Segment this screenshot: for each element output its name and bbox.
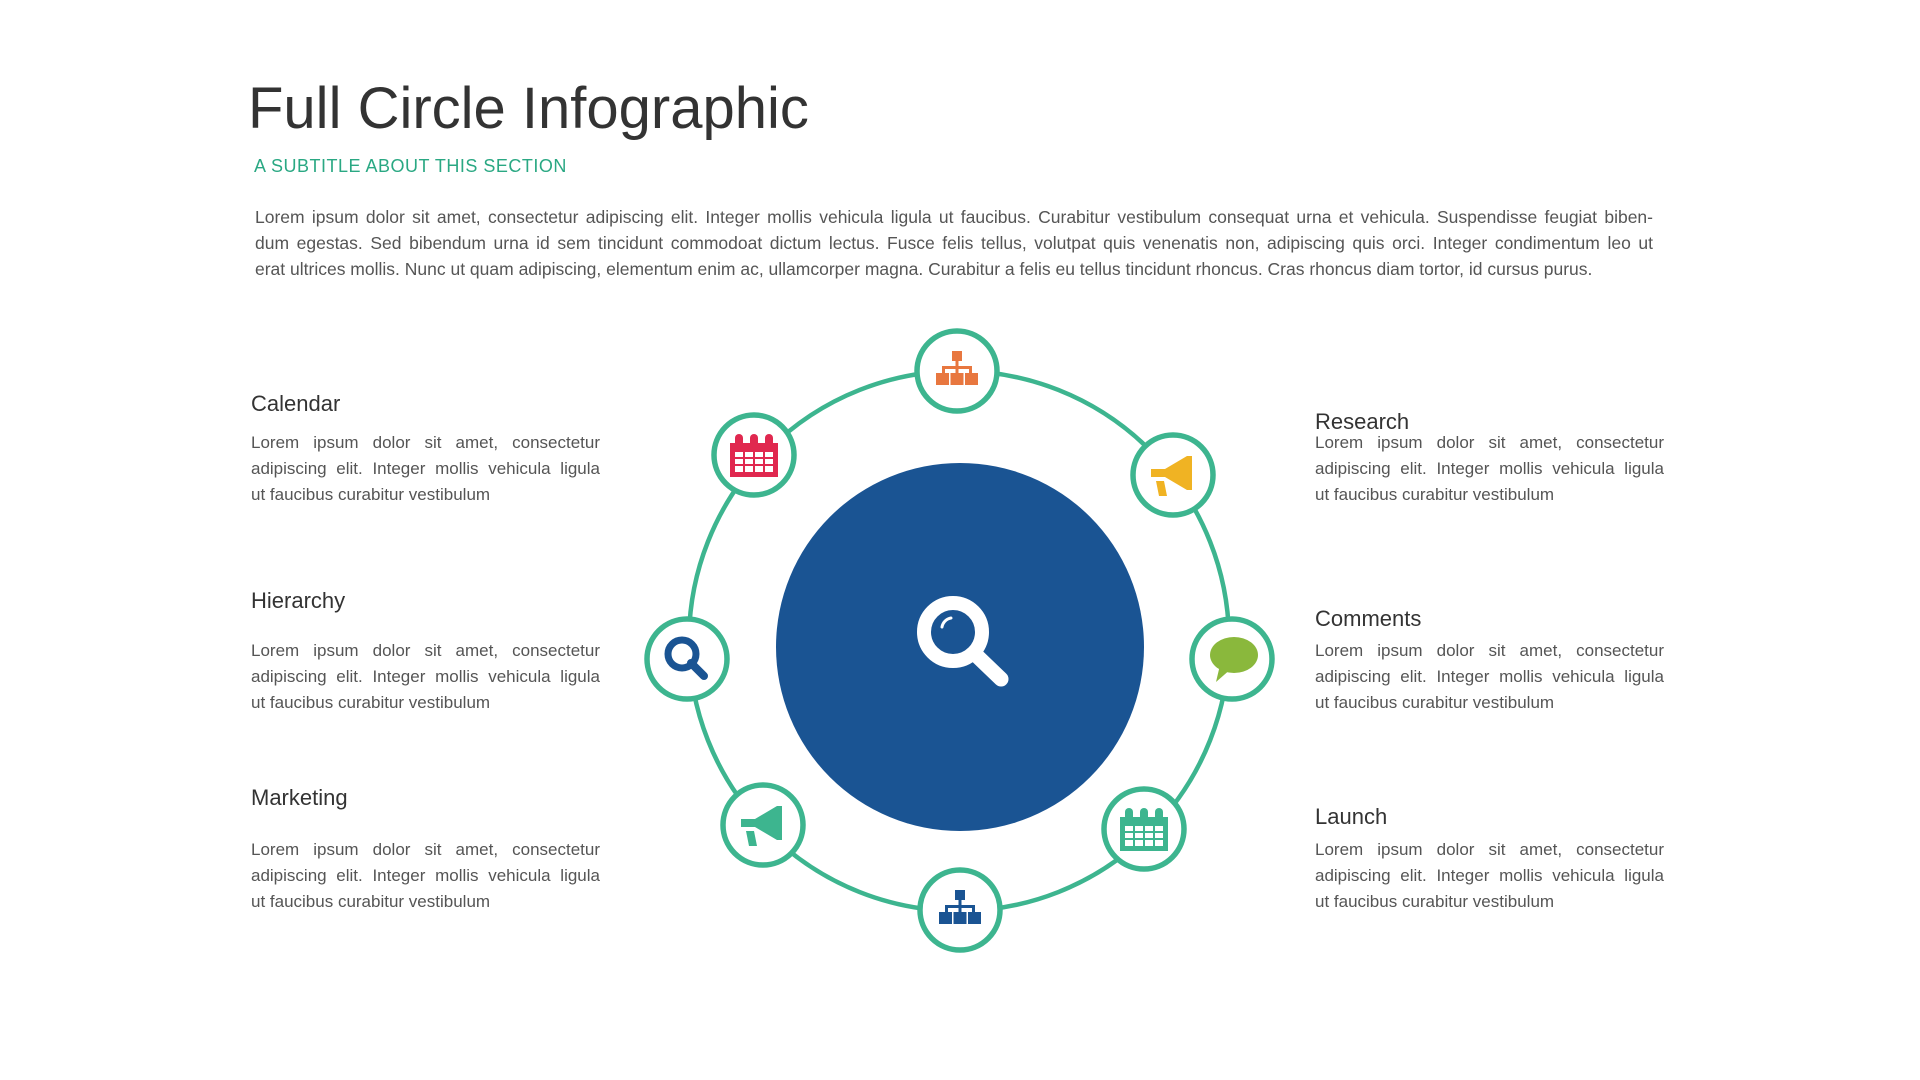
text: Hierarchy: adipiscing elit. Integer mollis vehicula ligula <box>251 667 600 686</box>
intro paragraph: erat ultrices mollis. Nunc ut quam adipiscing, elementum enim ac, ullamcorper magna. Curabitur a felis eu tellus tincidunt rhoncus. Cras rhoncus diam tortor, id cursus purus. <box>255 259 1592 279</box>
text: Comments: adipiscing elit. Integer mollis vehicula ligula <box>1315 667 1664 686</box>
text: Launch: ut faucibus curabitur vestibulum <box>1315 892 1554 911</box>
heading: Research: Research <box>1315 409 1409 434</box>
text: Comments: ut faucibus curabitur vestibulum <box>1315 693 1554 712</box>
node: calendar <box>714 415 794 495</box>
node: search <box>647 619 727 699</box>
text: Research: ut faucibus curabitur vestibulum <box>1315 485 1554 504</box>
text: Calendar: ut faucibus curabitur vestibulum <box>251 485 490 504</box>
text: Comments <box>1315 641 1664 712</box>
text: Calendar: adipiscing elit. Integer mollis vehicula ligula <box>251 459 600 478</box>
text: Hierarchy <box>251 641 600 712</box>
node: megaphone <box>1133 435 1213 515</box>
node: bottom hierarchy <box>920 870 1000 950</box>
text: Hierarchy: ut faucibus curabitur vestibulum <box>251 693 490 712</box>
text: Marketing: ut faucibus curabitur vestibulum <box>251 892 490 911</box>
title: Full Circle Infographic <box>248 76 809 141</box>
text: Launch: adipiscing elit. Integer mollis vehicula ligula <box>1315 866 1664 885</box>
text: Launch: Lorem ipsum dolor sit amet, consectetur <box>1315 840 1664 859</box>
node: launch calendar <box>1104 789 1184 869</box>
heading: Calendar: Calendar <box>251 391 340 416</box>
intro paragraph <box>255 207 1653 279</box>
text: Marketing: adipiscing elit. Integer mollis vehicula ligula <box>251 866 600 885</box>
heading: Launch: Launch <box>1315 804 1387 829</box>
node: comments <box>1192 619 1272 699</box>
intro paragraph: dum egestas. Sed bibendum urna id sem tincidunt commodoat dictum lectus. Fusce felis tellus, volutpat quis venenatis non, adipiscing quis orci. Integer condimentum leo ut <box>255 233 1653 253</box>
node: marketing megaphone <box>723 785 803 865</box>
text: Hierarchy: Lorem ipsum dolor sit amet, consectetur <box>251 641 600 660</box>
text: Research <box>1315 433 1664 504</box>
text: Launch <box>1315 840 1664 911</box>
node: top hierarchy <box>917 331 997 411</box>
heading: Marketing: Marketing <box>251 785 348 810</box>
text: Research: Lorem ipsum dolor sit amet, consectetur <box>1315 433 1664 452</box>
text: Comments: Lorem ipsum dolor sit amet, consectetur <box>1315 641 1664 660</box>
heading: Comments: Comments <box>1315 606 1421 631</box>
text: Calendar: Lorem ipsum dolor sit amet, consectetur <box>251 433 600 452</box>
text: Marketing: Lorem ipsum dolor sit amet, consectetur <box>251 840 600 859</box>
intro paragraph: Lorem ipsum dolor sit amet, consectetur adipiscing elit. Integer mollis vehicula ligula ut faucibus. Curabitur vestibulum consequat urna et vehicula. Suspendisse feugiat biben- <box>255 207 1653 227</box>
heading: Hierarchy: Hierarchy <box>251 588 345 613</box>
center circle <box>776 463 1144 831</box>
text: Marketing <box>251 840 600 911</box>
ring <box>689 371 1229 911</box>
icon: central magnifier <box>924 603 1001 679</box>
text: Calendar <box>251 433 600 504</box>
text: Research: adipiscing elit. Integer mollis vehicula ligula <box>1315 459 1664 478</box>
subtitle: A SUBTITLE ABOUT THIS SECTION <box>254 156 567 176</box>
